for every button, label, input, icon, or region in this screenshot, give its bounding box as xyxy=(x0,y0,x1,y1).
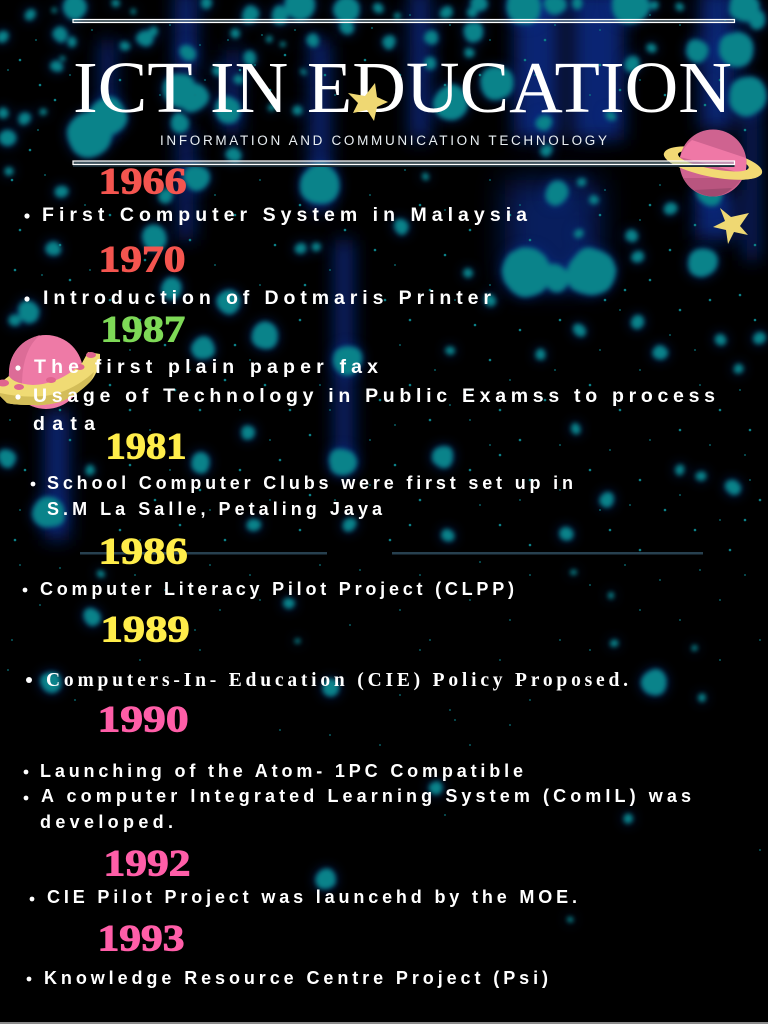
timeline entry 1993 xyxy=(27,917,548,988)
year 1970: 1970 xyxy=(98,238,185,280)
bullet xyxy=(23,588,27,592)
bullet xyxy=(24,296,30,302)
bullet xyxy=(31,482,35,486)
bullet xyxy=(15,365,21,371)
timeline entry 1992 xyxy=(30,842,577,907)
timeline entry 1989 xyxy=(26,608,628,691)
timeline entry 1986 xyxy=(23,530,514,599)
year 1986: 1986 xyxy=(98,530,188,572)
bullet xyxy=(24,213,30,219)
item text: First Computer System in Malaysia xyxy=(42,204,527,226)
bullet xyxy=(24,796,28,800)
item text: Computer Literacy Pilot Project (CLPP) xyxy=(40,579,514,599)
ring back xyxy=(661,140,765,186)
subtitle: INFORMATION AND COMMUNICATION TECHNOLOGY xyxy=(160,133,607,148)
icon: pink saucer planet left xyxy=(0,335,100,409)
dome xyxy=(9,335,83,409)
bullet xyxy=(15,394,21,400)
year 1989: 1989 xyxy=(100,608,190,650)
year 1992: 1992 xyxy=(104,842,190,884)
decorative divider left xyxy=(80,552,327,554)
item text line 1: School Computer Clubs were first set up in xyxy=(47,473,573,493)
title: ICT IN EDUCATION xyxy=(73,47,732,128)
saucer dots xyxy=(0,380,9,386)
planet body xyxy=(680,130,746,196)
timeline entry 1987 xyxy=(15,308,715,435)
saucer xyxy=(0,352,100,405)
item text line 1: Usage of Technology in Public Examss to process xyxy=(33,385,715,407)
timeline entry 1966 xyxy=(24,161,527,226)
top rule xyxy=(73,20,734,22)
year 1993: 1993 xyxy=(98,917,184,959)
item text line 1: A computer Integrated Learning System (ComIL) was xyxy=(41,786,691,806)
ring front xyxy=(661,151,762,186)
item text: CIE Pilot Project was launcehd by the MOE. xyxy=(47,887,577,907)
item text: The first plain paper fax xyxy=(34,356,378,378)
icon: star right xyxy=(713,208,749,244)
timeline entry 1990 xyxy=(24,699,691,832)
decorative divider right xyxy=(392,552,703,554)
item text line 2: data xyxy=(33,413,95,435)
bullet xyxy=(27,977,31,981)
icon: star on title xyxy=(348,83,388,121)
timeline entry 1981 xyxy=(31,426,573,519)
item text line 2: S.M La Salle, Petaling Jaya xyxy=(47,499,383,519)
year 1966: 1966 xyxy=(98,161,187,202)
timeline entry 1970 xyxy=(24,238,491,309)
item text line 2: developed. xyxy=(40,812,173,832)
bottom rule xyxy=(73,161,734,167)
bottom edge strip xyxy=(0,1022,768,1024)
year 1981: 1981 xyxy=(106,426,186,467)
year 1987: 1987 xyxy=(100,308,185,350)
item text: Launching of the Atom- 1PC Compatible xyxy=(40,761,523,781)
bullet xyxy=(24,770,28,774)
bullet xyxy=(26,677,32,683)
item text: Computers-In- Education (CIE) Policy Proposed. xyxy=(46,670,628,691)
year 1990: 1990 xyxy=(98,699,189,740)
bullet xyxy=(30,897,34,901)
item text: Knowledge Resource Centre Project (Psi) xyxy=(44,968,548,988)
icon: ringed pink planet top right xyxy=(661,130,765,196)
item text: Introduction of Dotmaris Printer xyxy=(43,287,491,309)
